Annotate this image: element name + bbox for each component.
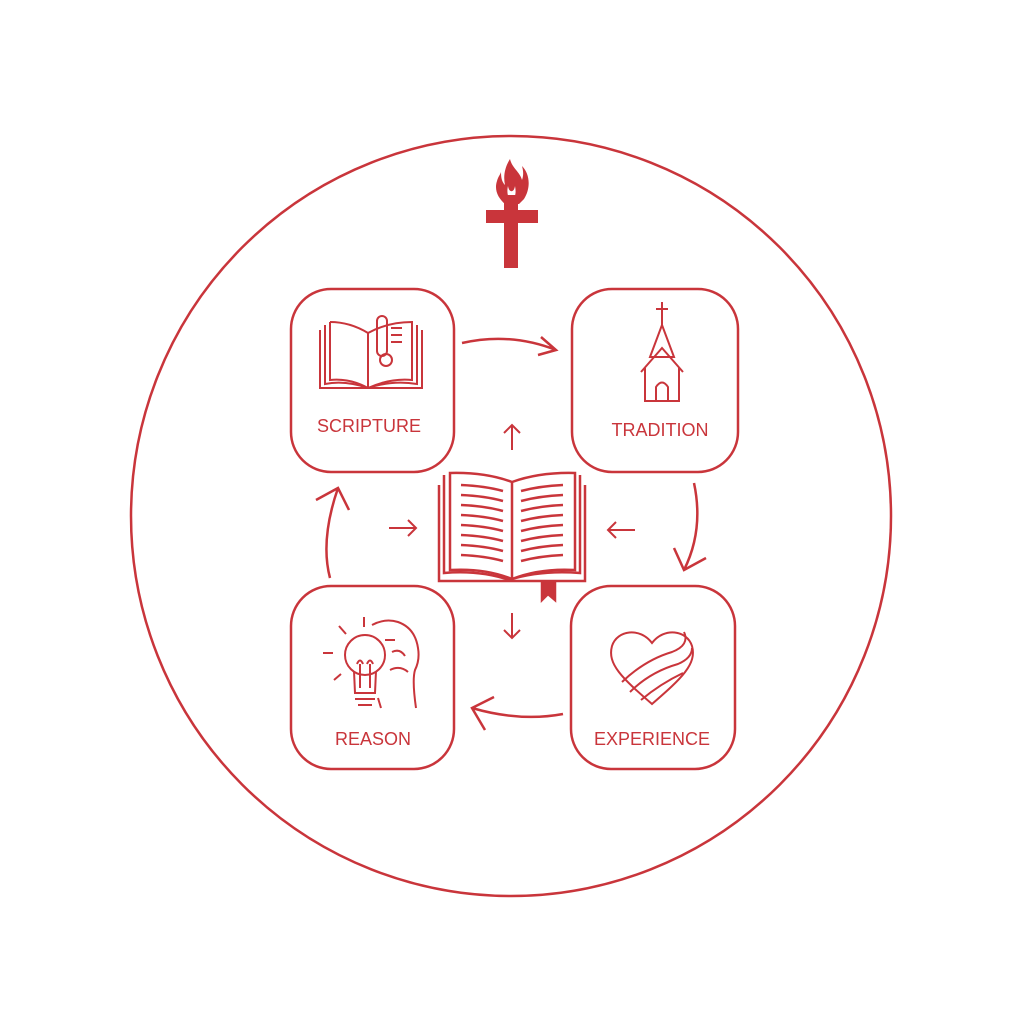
icon: heart with waves	[611, 632, 693, 704]
arrow: scripture to tradition	[462, 337, 556, 355]
panel: scripture	[291, 289, 454, 472]
icon: church	[641, 302, 683, 401]
arrow: tradition to experience	[674, 483, 706, 570]
icon: lightbulb and brain	[323, 617, 419, 708]
icon: flaming cross	[486, 159, 538, 268]
icon: book with scroll	[320, 316, 422, 388]
arrow: up from bible	[504, 425, 520, 450]
arrow: reason to scripture	[316, 488, 349, 578]
arrow: left into bible	[389, 520, 416, 536]
arrow: right into bible	[608, 522, 635, 538]
label: reason: REASON	[335, 729, 411, 749]
arrow: down from bible	[504, 613, 520, 638]
icon: central open bible	[439, 473, 585, 600]
panel: tradition	[572, 289, 738, 472]
outer circle	[131, 136, 891, 896]
label: experience: EXPERIENCE	[594, 729, 710, 749]
label: scripture: SCRIPTURE	[317, 416, 421, 436]
panel: experience	[571, 586, 735, 769]
label: tradition: TRADITION	[612, 420, 708, 440]
panel: reason	[291, 586, 454, 769]
arrow: experience to reason	[472, 697, 563, 730]
